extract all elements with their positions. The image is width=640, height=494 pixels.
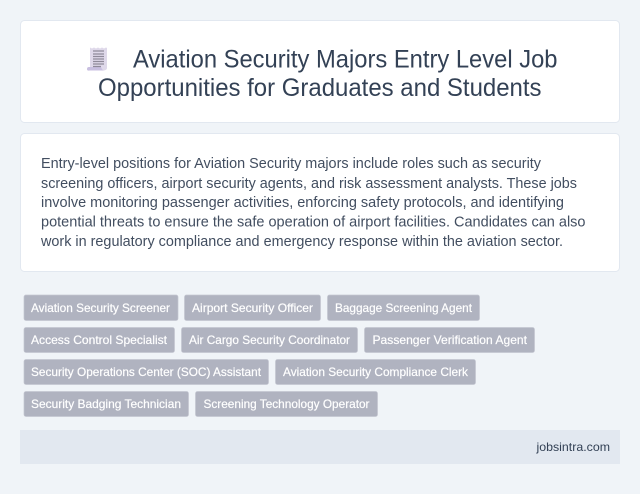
footer source text: jobsintra.com [535,440,610,454]
tag: Access Control Specialist [31,333,168,347]
tag: Security Operations Center (SOC) Assistant [31,365,262,379]
tag [182,328,358,352]
tag: Aviation Security Screener [31,301,170,315]
description text: screening officers, airport security agents, and risk assessment analysts. These jobs [41,176,577,192]
tag: Aviation Security Compliance Clerk [283,365,469,379]
tag [24,360,268,384]
tag [24,295,178,320]
tag [196,392,378,416]
description text: potential threats to ensure the safe operation of airport facilities. Candidates can also [41,214,585,230]
description text: involve monitoring passenger activities, enforcing safety protocols, and identifying [41,195,564,211]
tag [184,295,320,320]
tag [24,328,174,352]
title text: Aviation Security Majors Entry Level Job [133,46,558,74]
tag: Baggage Screening Agent [335,301,473,315]
footer bar [20,430,620,464]
tag: Airport Security Officer [192,301,313,315]
tag: Passenger Verification Agent [372,333,528,347]
tag [364,328,534,352]
description text: work in regulatory compliance and emergency response within the aviation sector. [40,234,563,250]
tag: Security Badging Technician [31,397,181,411]
tag [328,295,480,320]
tag [24,392,188,416]
panel: title [20,20,620,122]
title text: Opportunities for Graduates and Students [98,74,542,102]
description text: Entry-level positions for Aviation Security majors include roles such as security [41,156,542,172]
tag: Screening Technology Operator [204,397,370,411]
panel: description [20,134,620,272]
tag: Air Cargo Security Coordinator [189,333,350,347]
tag [276,360,476,384]
icon: document scroll [87,48,107,71]
tag list [24,295,534,416]
